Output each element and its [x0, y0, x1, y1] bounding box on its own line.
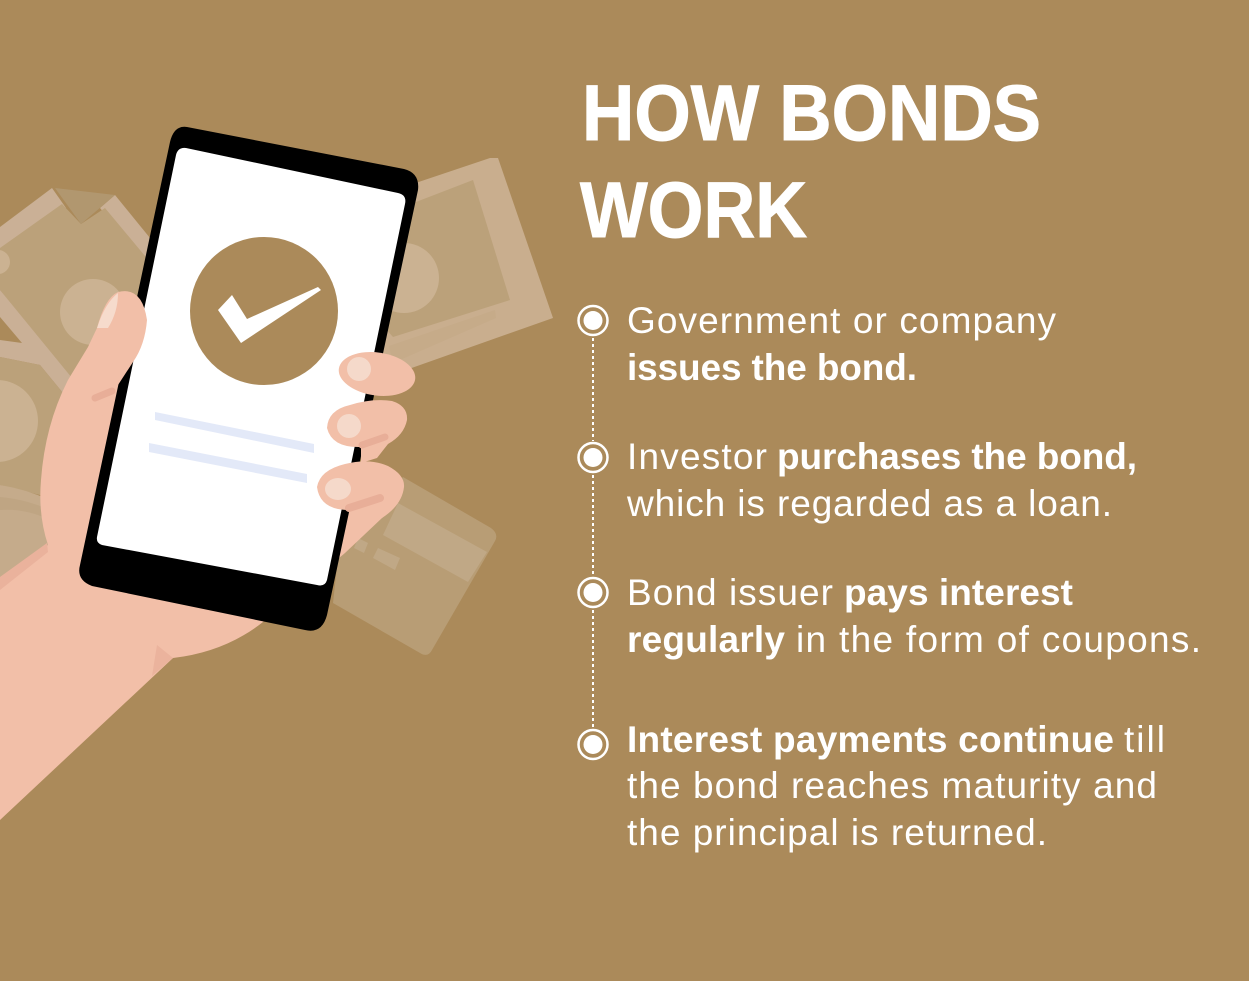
step 1: [578, 300, 1056, 388]
step 3 text: Bond issuer: [627, 572, 833, 613]
finger 1: [336, 347, 418, 401]
finger 2: [327, 400, 407, 463]
finger 3: [317, 461, 404, 520]
step 4 text: till: [1124, 719, 1165, 760]
step 1 text: issues the bond.: [627, 347, 917, 388]
icon: phone body: [79, 127, 418, 631]
icon: phone screen: [97, 148, 405, 585]
title: HOW BONDS: [582, 68, 1041, 157]
icon: credit card: [333, 477, 496, 655]
title: WORK: [580, 165, 807, 254]
bullet 4: [578, 730, 608, 759]
bullet 2: [578, 443, 608, 472]
step 3 text: in the form of coupons.: [796, 619, 1201, 660]
illustration: hand behind phone: [0, 380, 398, 820]
step 2 text: Investor: [627, 436, 767, 477]
placeholder lines on screen: [149, 412, 314, 483]
step 2: [578, 436, 1137, 524]
step 1 text: [627, 300, 1056, 388]
step 3 text: pays interest: [844, 572, 1073, 613]
title: [580, 68, 1041, 254]
step 4 text: the principal is returned.: [627, 812, 1047, 853]
icon: check mark badge: [190, 237, 338, 385]
timeline connector: [592, 338, 594, 728]
step 2 text: [626, 436, 1137, 524]
illustration: money in background: [0, 158, 553, 655]
step 3 text: [627, 572, 1201, 660]
icon: right banknote: [340, 158, 553, 376]
step 4: [578, 719, 1165, 853]
icon: left banknote: [0, 188, 150, 400]
step 4 text: Interest payments continue: [627, 719, 1114, 760]
bullet 1: [578, 306, 608, 335]
step 3: [578, 572, 1201, 660]
step 4 text: [627, 719, 1165, 853]
bullet 3: [578, 578, 608, 607]
illustration: fingers: [317, 347, 418, 520]
step 2 text: which is regarded as a loan.: [626, 483, 1112, 524]
illustration: thumb: [68, 291, 147, 420]
step 2 text: purchases the bond,: [777, 436, 1137, 477]
step 3 text: regularly: [627, 619, 785, 660]
icon: lower left banknote: [0, 290, 90, 577]
step 1 text: Government or company: [627, 300, 1056, 341]
step 4 text: the bond reaches maturity and: [627, 765, 1157, 806]
